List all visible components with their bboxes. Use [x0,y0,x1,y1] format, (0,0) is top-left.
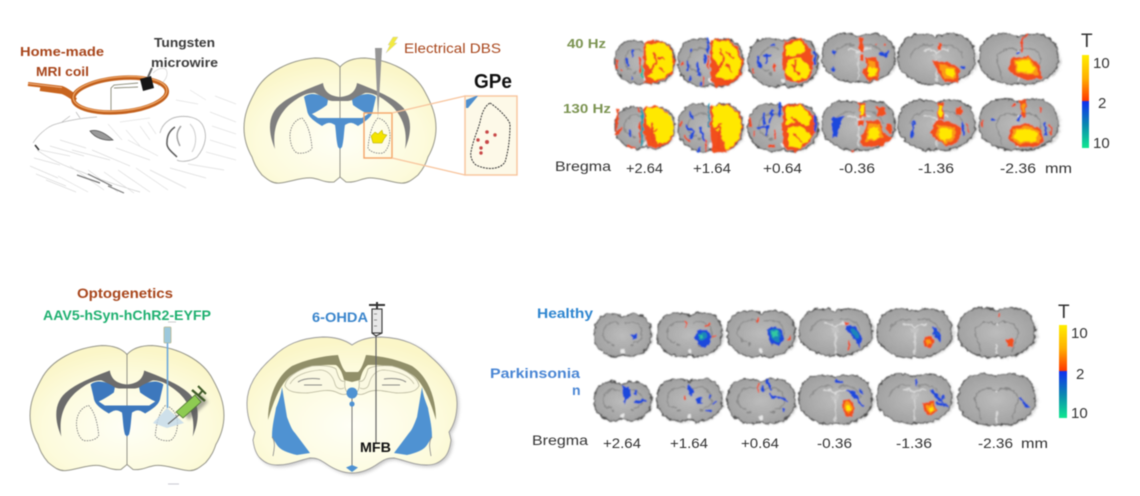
optic fiber [164,322,176,408]
rat head sketch [30,68,236,193]
colour scale: 10 [1093,55,1110,72]
colour scale: 10 [1071,405,1088,422]
heading [43,285,211,323]
bregma labels: mm [1021,435,1048,451]
label: Tungsten microwire: Tungsten [154,35,215,50]
panel: electrical DBS atlas [244,37,517,183]
panel: MRI coil on rat head [20,35,236,193]
row labels [563,36,612,116]
colour scale: 2 [1098,95,1106,112]
label: Tungsten microwire: microwire [151,55,218,70]
bregma labels: mm [1045,160,1072,176]
colour scale: 10 [1071,325,1088,342]
colour scale: 10 [1093,135,1110,152]
panel: 6-OHDA lesion atlas [247,302,459,475]
row labels: 40 Hz [567,36,607,51]
icon: lightning bolt [386,37,398,53]
hippocampus and substantia nigra, right [352,355,436,456]
bregma labels: +1.64 [670,435,708,451]
microwire [111,83,138,110]
heading: Optogenetics [77,285,173,301]
midline [351,398,353,470]
connector [140,76,154,91]
coil tubes [28,84,76,100]
stimulation site [371,130,387,143]
bregma labels: -2.36 [978,435,1013,451]
label: MFB: MFB [360,439,391,455]
coil loop [72,74,168,116]
colour scale: 2 [1076,366,1084,383]
panel: optogenetics atlas [30,285,224,484]
bregma labels: +2.64 [603,435,641,451]
zoom box [364,113,392,158]
bregma labels: -0.36 [817,435,852,451]
label: 6-OHDA: 6-OHDA [312,309,368,325]
label: Electrical DBS: Electrical DBS [404,40,501,56]
ventricle and marker [346,388,358,472]
bregma labels: -1.36 [918,160,954,176]
brain atlas [30,346,224,471]
bregma labels: -2.36 [1000,160,1036,176]
bregma labels: Bregma [532,432,588,448]
inset: GPe [465,71,517,175]
bregma labels: -1.36 [896,435,932,451]
bregma labels: -0.36 [839,160,875,176]
row labels: 130 Hz [563,101,612,116]
icon: syringe [369,302,385,336]
bregma labels: +2.64 [626,160,663,176]
colour scale [1058,302,1088,422]
hippocampus and substantia nigra, left [268,355,352,456]
row 40 Hz slices [615,34,1060,88]
row healthy slices [594,308,1037,358]
row labels: Healthy [537,305,593,321]
electrode [375,48,382,118]
colour scale: T [1081,31,1093,52]
row parkinsonian slices [594,374,1037,426]
bregma labels: Bregma [555,158,611,174]
panel: DBS fMRI maps [555,31,1110,176]
bregma labels: +0.64 [763,160,802,176]
panel: optogenetic fMRI maps [490,302,1088,451]
row 130 Hz slices [615,99,1060,153]
bregma labels: +1.64 [693,160,731,176]
row labels [490,305,593,398]
needle [375,335,377,443]
rat eye [90,130,113,140]
heading: AAV5-hSyn-hChR2-EYFP [43,307,211,323]
label: Tungsten microwire [151,35,218,70]
label: Home-made MRI coil: Home-made [20,44,104,59]
brain outline [249,339,459,475]
colour scale [1081,31,1110,152]
label: Home-made MRI coil: MRI coil [36,64,89,79]
colour scale: T [1058,302,1070,323]
light cone [153,408,184,428]
label: GPe: GPe [474,71,512,93]
icon: green syringe [168,386,208,424]
row labels: n [572,382,581,398]
label: Home-made MRI coil [20,44,104,79]
bregma labels [555,158,1072,176]
row labels: Parkinsonia [490,365,580,381]
bregma labels [532,432,1048,451]
bregma labels: +0.64 [741,435,779,451]
